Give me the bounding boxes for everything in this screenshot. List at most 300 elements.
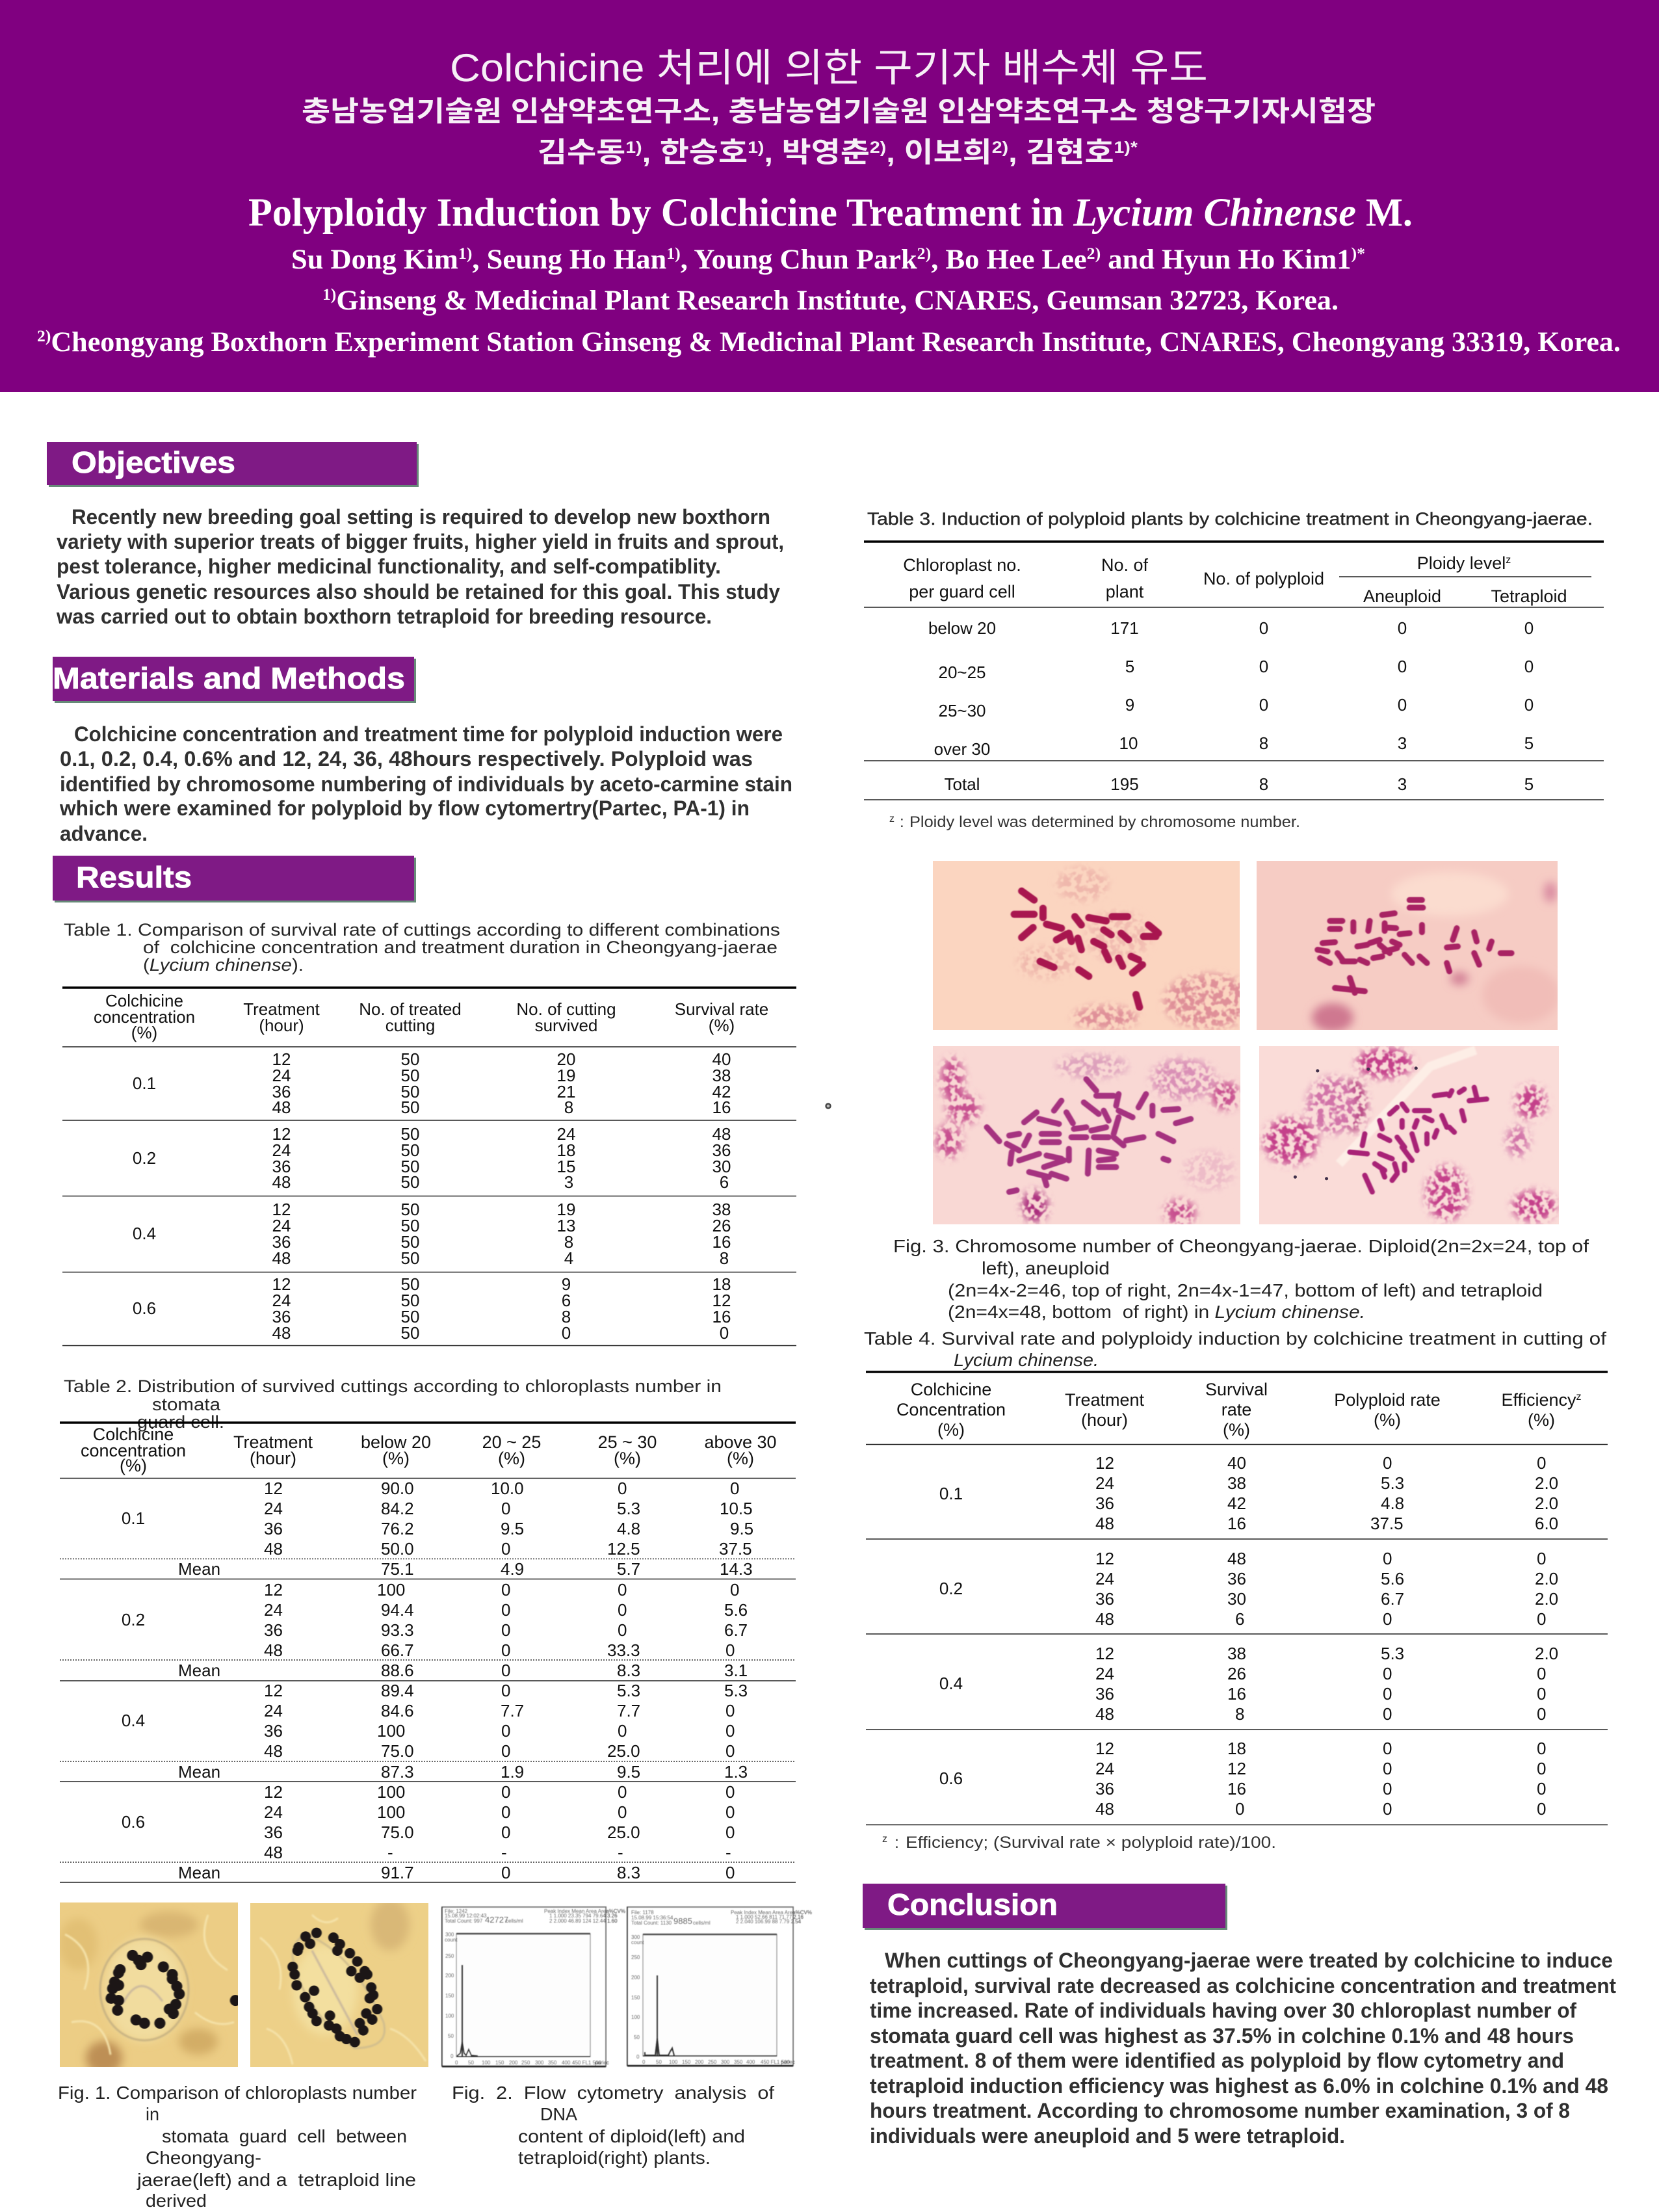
- table 1 rows: 6: [562, 1291, 571, 1310]
- table 2 rows: 5.7: [617, 1559, 640, 1579]
- table 1 rows: 48: [272, 1323, 291, 1343]
- table 3 rows: Total: [945, 774, 980, 794]
- figure 2: flow cytometry diploid: 150: [495, 2060, 504, 2066]
- table 2 rows: 88.6: [381, 1661, 414, 1680]
- figure 2: flow cytometry tetraploid: 300: [721, 2059, 730, 2065]
- table 4 rows: 5.6: [1381, 1569, 1404, 1588]
- table 3 header: Tetraploid: [1491, 586, 1567, 606]
- figure 2: flow cytometry tetraploid: 350: [734, 2059, 743, 2065]
- table 2 rows: 48: [264, 1640, 283, 1660]
- figure 2: flow cytometry tetraploid: 15.08.99 15:36:54: [631, 1915, 673, 1921]
- table 4 header: [896, 1380, 1582, 1440]
- table 1 caption: (Lycium chinense ).: [143, 955, 304, 975]
- figure 2 caption: Fig. 2. Flow cytometry analysis of: [452, 2083, 774, 2103]
- figure 2: flow cytometry tetraploid: 250: [631, 1955, 640, 1960]
- table 2 rows: 100: [377, 1782, 405, 1802]
- table 4 rows: 0: [1383, 1739, 1392, 1758]
- table 4 rows: 0: [1537, 1704, 1546, 1724]
- table 4 rows: 0: [1383, 1704, 1392, 1724]
- authors: English: 2): [917, 245, 931, 263]
- table 4 header: Concentration: [896, 1400, 1006, 1419]
- figure 2: flow cytometry diploid: 250: [521, 2060, 530, 2066]
- table 3 rows: 8: [1259, 733, 1268, 753]
- figure 2: flow cytometry tetraploid: 50: [656, 2059, 662, 2065]
- table 4 rows: 0.6: [939, 1769, 963, 1788]
- conclusion text: time increased. Rate of individuals having over 30 chloroplast number of: [870, 1999, 1576, 2022]
- table 2 rows: 94.4: [381, 1600, 414, 1620]
- heading: materials and methods: Materials and Methods: [53, 661, 405, 695]
- table 3 header: [903, 553, 1567, 606]
- table 1 rows: 48: [272, 1172, 291, 1192]
- methods text: identified by chromosome numbering of individuals by aceto-carmine stain: [60, 772, 792, 796]
- table 3 rows: 0: [1524, 657, 1534, 676]
- heading: objectives: [47, 442, 419, 487]
- table 1 rows: 48: [712, 1124, 731, 1144]
- table 1 rows: 16: [712, 1232, 731, 1252]
- table 2 rows: 0.6: [122, 1812, 145, 1832]
- figure 2: flow cytometry diploid: 100: [445, 2013, 454, 2019]
- table 3: [864, 542, 1604, 800]
- table 2 rows: 36: [264, 1620, 283, 1640]
- title: Korean: Colchicine 처리에 의한 구기자 배수체 유도: [450, 46, 1208, 90]
- table 2 header: Colchicine: [93, 1425, 174, 1444]
- table 4 rows: 0: [1383, 1684, 1392, 1704]
- table 4 caption: Table 4. Survival rate and polyploidy induction by colchicine treatment in cutting of: [864, 1328, 1606, 1349]
- table 1 rows: 21: [557, 1082, 575, 1101]
- affiliations: Korean: 충남농업기술원 인삼약초연구소, 충남농업기술원 인삼약초연구소 청양구기자시험장: [302, 96, 1376, 127]
- figure 2: flow cytometry tetraploid: File: 1178: [631, 1910, 654, 1916]
- table 2 rows: 0: [730, 1479, 739, 1498]
- table 2 rows: 0: [725, 1863, 735, 1882]
- table 3 footnote: z: [889, 813, 895, 824]
- table 2 rows: 0: [618, 1580, 627, 1600]
- affiliation 1: English: 1): [322, 286, 336, 304]
- table 3 rows: 3: [1398, 774, 1407, 794]
- table 1 rows: 12: [272, 1124, 291, 1144]
- table 4 header: (%): [937, 1420, 965, 1440]
- table 4 rows: 6: [1235, 1609, 1244, 1629]
- table 4 rows: 16: [1227, 1779, 1246, 1798]
- table 1 rows: 8: [562, 1307, 571, 1326]
- panel: materials and methods: [53, 657, 792, 845]
- table 3 footnote: :: [900, 813, 904, 831]
- table 1 rows: 36: [272, 1232, 291, 1252]
- conclusion text: individuals were aneuploid and 5 were tetraploid.: [870, 2124, 1345, 2148]
- panel: objectives: [47, 442, 784, 628]
- figure 2: flow cytometry tetraploid: 300: [631, 1934, 640, 1940]
- table 4 rows: 36: [1095, 1779, 1114, 1798]
- figure 2: flow cytometry tetraploid: 2 2.040 106.99 88 7.79 2.54: [736, 1919, 802, 1925]
- heading: results: Results: [76, 860, 192, 894]
- table 4 rows: 0: [1383, 1664, 1392, 1683]
- table 4 header: rate: [1221, 1400, 1251, 1419]
- table 2 rows: 4.9: [501, 1559, 524, 1579]
- methods text: Colchicine concentration and treatment time for polyploid induction were: [74, 722, 783, 746]
- figure 2: flow cytometry diploid: File: 1242: [445, 1908, 468, 1914]
- table 2 rows: 0: [725, 1640, 735, 1660]
- figure 1 caption: Fig. 1. Comparison of chloroplasts number: [58, 2083, 417, 2103]
- table 1 rows: 50: [401, 1049, 419, 1069]
- table 2 rows: 100: [377, 1802, 405, 1822]
- table 3 rows: 3: [1398, 733, 1407, 753]
- authors: English: , Seung Ho Han: [472, 244, 666, 275]
- table 2 rows: 0: [725, 1721, 735, 1741]
- table 1 rows: 16: [712, 1098, 731, 1117]
- table 4 rows: 0.4: [939, 1674, 963, 1693]
- figure 2: flow cytometry diploid: 2 2.000 46.89 124 12.44 1.60: [549, 1918, 618, 1924]
- table 4 rows: 5.3: [1381, 1473, 1404, 1493]
- table 2 rows: 0: [725, 1823, 735, 1842]
- table 4 rows: 0: [1537, 1759, 1546, 1778]
- table 1 rows: 0.4: [133, 1224, 156, 1243]
- figure 2: flow cytometry tetraploid: [627, 1907, 812, 2066]
- table 1 header: cutting: [385, 1016, 435, 1035]
- table 1 rows: 0.6: [133, 1298, 156, 1318]
- figure 2: flow cytometry tetraploid: 150: [631, 1995, 640, 2001]
- table 2 header: (%): [614, 1449, 641, 1468]
- table 1 rows: 8: [720, 1248, 729, 1268]
- table 2 header: 25 ~ 30: [598, 1432, 657, 1452]
- table 1 rows: 19: [557, 1066, 575, 1085]
- table 2 rows: 36: [264, 1519, 283, 1538]
- table 4 rows: 0: [1383, 1609, 1392, 1629]
- figure 3: tetraploid chromosomes: [1259, 1046, 1559, 1224]
- authors: English: , Young Chun Park: [681, 244, 917, 275]
- table 2 rows: 25.0: [607, 1823, 640, 1842]
- table 4 rows: 42: [1227, 1494, 1246, 1513]
- table 2 rows: 75.0: [381, 1741, 414, 1761]
- affiliation 1: English: Ginseng & Medicinal Plant Research Institute, CNARES, Geumsan 32723, Korea.: [336, 285, 1339, 316]
- table 1 rows: 50: [401, 1291, 419, 1310]
- table 4 rows: 12: [1095, 1739, 1114, 1758]
- table 2 rows: 48: [264, 1539, 283, 1559]
- table 4: [866, 1372, 1608, 1824]
- title: English: Polyploidy Induction by Colchicine Treatment in Lycium Chinense M.: [248, 191, 1413, 235]
- table 3 rows: 9: [1125, 695, 1134, 715]
- table 2 rows: 0: [501, 1782, 510, 1802]
- table 4 rows: 0: [1383, 1549, 1392, 1568]
- table 1 rows: 36: [712, 1140, 731, 1160]
- table 1 rows: 50: [401, 1248, 419, 1268]
- table 1 rows: 16: [712, 1307, 731, 1326]
- table 2 rows: 12: [264, 1782, 283, 1802]
- table 3 header: z: [1506, 555, 1511, 566]
- figure 1: stomata right photo: [250, 1899, 428, 2067]
- table 1 rows: 36: [272, 1082, 291, 1101]
- table 2 rows: 33.3: [607, 1640, 640, 1660]
- table 2 rows: 9.5: [730, 1519, 753, 1538]
- table 2 rows: 10.0: [491, 1479, 524, 1498]
- conclusion text: stomata guard cell was highest as 37.5% in colchine 0.1% and 48 hours: [870, 2024, 1574, 2047]
- table 4 rows: 0: [1537, 1739, 1546, 1758]
- table 4 rows: 36: [1095, 1589, 1114, 1609]
- table 4 header: Treatment: [1065, 1390, 1145, 1410]
- header banner: [0, 0, 1659, 392]
- table 2 rows: 0: [725, 1802, 735, 1822]
- table 2 rows: 89.4: [381, 1681, 414, 1700]
- authors: Korean: , 이보희: [886, 137, 992, 168]
- table 2 header: concentration: [81, 1441, 186, 1460]
- table 1 rows: 48: [272, 1098, 291, 1117]
- table 2 rows: 24: [264, 1701, 283, 1720]
- table 1 rows: 18: [712, 1274, 731, 1294]
- table 2 rows: 9.5: [617, 1762, 640, 1782]
- figure 1 caption: stomata guard cell between: [162, 2126, 407, 2146]
- table 1 rows: 38: [712, 1200, 731, 1219]
- figure 2: flow cytometry tetraploid: 50: [634, 2034, 640, 2040]
- table 3 rows: 0: [1259, 695, 1268, 715]
- table 2 rows: 24: [264, 1802, 283, 1822]
- table 4 rows: 36: [1227, 1569, 1246, 1588]
- table 3 rows: 171: [1110, 618, 1139, 638]
- figure 2: flow cytometry diploid: 100: [482, 2060, 491, 2066]
- table 4 rows: [939, 1453, 1558, 1819]
- table 2 header: (hour): [250, 1449, 296, 1468]
- figure 2: flow cytometry diploid: parlec: [595, 2060, 609, 2066]
- table 4 footnote: Efficiency; (Survival rate × polyploid rate)/100.: [906, 1834, 1276, 1852]
- table 4 rows: 2.0: [1535, 1473, 1558, 1493]
- table 2 header: 20 ~ 25: [482, 1432, 541, 1452]
- table 2 rows: 0: [501, 1802, 510, 1822]
- table 1 header: [94, 991, 768, 1042]
- table 3 rows: 0: [1398, 657, 1407, 676]
- table 2 caption: [64, 1376, 722, 1432]
- table 2 rows: 9.5: [501, 1519, 524, 1538]
- table 4 rows: 48: [1227, 1549, 1246, 1568]
- figure 2: flow cytometry tetraploid: 1 1.000 52.66 811 71.77 2.16: [736, 1914, 803, 1920]
- figure 2: flow cytometry diploid: Total Count: 997: [445, 1918, 483, 1924]
- table 2 rows: 76.2: [381, 1519, 414, 1538]
- table 2 rows: -: [618, 1843, 623, 1862]
- table 2 header: (%): [727, 1449, 754, 1468]
- figure 2 caption: DNA: [540, 2104, 577, 2124]
- table 4 rows: 18: [1227, 1739, 1246, 1758]
- table 1 rows: 50: [401, 1082, 419, 1101]
- table 3 header: Ploidy level: [1417, 553, 1506, 573]
- table 2 rows: 6.7: [724, 1620, 748, 1640]
- table 4 rows: 38: [1227, 1473, 1246, 1493]
- figure 1 caption: [58, 2083, 417, 2211]
- table 1 header: survived: [535, 1016, 597, 1035]
- table 2 rows: 8.3: [617, 1661, 640, 1680]
- table 1 header: (hour): [259, 1016, 304, 1035]
- table 1 rows: 12: [272, 1274, 291, 1294]
- table 1 rows: 12: [272, 1049, 291, 1069]
- table 2 rows: 5.3: [617, 1681, 640, 1700]
- table 2 rows: -: [501, 1843, 507, 1862]
- objectives text: Recently new breeding goal setting is required to develop new boxthorn: [72, 505, 770, 529]
- table 2 rows: 0: [725, 1782, 735, 1802]
- table 2 rows: 12.5: [607, 1539, 640, 1559]
- table 2 rows: 7.7: [501, 1701, 524, 1720]
- table 3 rows: 195: [1110, 774, 1139, 794]
- table 4 rows: 4.8: [1381, 1494, 1404, 1513]
- table 2 rows: 100: [377, 1721, 405, 1741]
- table 4 rows: 0: [1537, 1453, 1546, 1473]
- table 2 rows: 25.0: [607, 1741, 640, 1761]
- table 2 rows: 0: [501, 1661, 510, 1680]
- affiliation 2: English: 2): [37, 328, 51, 345]
- table 1 rows: 50: [401, 1098, 419, 1117]
- table 2 rows: 12: [264, 1479, 283, 1498]
- objectives text: Various genetic resources also should be retained for this goal. This study: [57, 580, 780, 603]
- table 3 rows: 0: [1524, 618, 1534, 638]
- figure 2: flow cytometry diploid: count: [445, 1937, 458, 1943]
- objectives text: was carried out to obtain boxthorn tetraploid for breeding resource.: [56, 605, 712, 628]
- table 2 rows: 0.4: [122, 1711, 145, 1730]
- authors: English: 1): [666, 245, 681, 263]
- table 4 rows: 5.3: [1381, 1644, 1404, 1663]
- table 4 rows: 12: [1095, 1549, 1114, 1568]
- table 3 rows: 0: [1259, 657, 1268, 676]
- table 1 rows: 38: [712, 1066, 731, 1085]
- table 4 header: Polyploid rate: [1334, 1390, 1441, 1410]
- figure 2: flow cytometry tetraploid: 400: [746, 2059, 755, 2065]
- table 4 rows: 24: [1095, 1759, 1114, 1778]
- table 1 rows: 26: [712, 1216, 731, 1235]
- table 1 rows: 50: [401, 1066, 419, 1085]
- table 1 header: (%): [131, 1023, 157, 1042]
- figure 2: flow cytometry diploid: Peak Index Mean Area Area%CV%: [544, 1908, 625, 1914]
- table 2 rows: 0: [501, 1620, 510, 1640]
- figure 2: flow cytometry diploid: 0: [455, 2060, 458, 2066]
- table 4 rows: 0: [1537, 1609, 1546, 1629]
- figure 2: flow cytometry tetraploid: 0: [642, 2059, 646, 2065]
- authors: Korean: 1): [625, 138, 642, 157]
- table 4 rows: 16: [1227, 1684, 1246, 1704]
- authors: English: Su Dong Kim: [291, 244, 453, 275]
- methods text: [59, 722, 792, 845]
- figure 2: flow cytometry diploid: 350: [548, 2060, 557, 2066]
- table 4 header: Survival: [1205, 1380, 1268, 1399]
- table 2 rows: 0: [501, 1640, 510, 1660]
- table 2 rows: 0: [730, 1580, 739, 1600]
- table 1 rows: 50: [401, 1274, 419, 1294]
- figure 2: flow cytometry tetraploid: 250: [708, 2059, 717, 2065]
- table 1 rows: 40: [712, 1049, 731, 1069]
- table 2 rows: 75.0: [381, 1823, 414, 1842]
- table 4 rows: 0: [1383, 1453, 1392, 1473]
- table 2 rows: 0: [618, 1721, 627, 1741]
- table 2: [60, 1423, 796, 1882]
- table 4 header: Colchicine: [911, 1380, 991, 1399]
- table 4 rows: 0: [1537, 1779, 1546, 1798]
- table 4 rows: 36: [1095, 1684, 1114, 1704]
- table 4 rows: 6.0: [1535, 1514, 1558, 1533]
- table 2 rows: 0.2: [122, 1610, 145, 1629]
- table 1 rows: 15: [557, 1157, 575, 1176]
- table 2 rows: 14.3: [720, 1559, 753, 1579]
- figure 2 caption: [452, 2083, 774, 2168]
- table 1 rows: 50: [401, 1307, 419, 1326]
- table 2 rows: 90.0: [381, 1479, 414, 1498]
- figure 2: flow cytometry tetraploid: count: [631, 1940, 644, 1945]
- heading: objectives: Objectives: [72, 445, 235, 479]
- table 1 header: (%): [709, 1016, 735, 1035]
- figure 2: flow cytometry tetraploid: 100: [631, 2014, 640, 2020]
- table 2 rows: 1.3: [724, 1762, 748, 1782]
- table 3 rows: 0: [1259, 618, 1268, 638]
- table 4 header: (%): [1223, 1420, 1250, 1440]
- table 2 rows: 4.8: [617, 1519, 640, 1538]
- table 2 rows: Mean: [178, 1762, 220, 1782]
- table 2 rows: 0: [501, 1499, 510, 1518]
- table 2 rows: 50.0: [381, 1539, 414, 1559]
- table 4 header: Efficiency: [1501, 1390, 1576, 1410]
- table 4 rows: 0: [1383, 1759, 1392, 1778]
- table 2 header: (%): [120, 1456, 147, 1475]
- table 1 rows: 20: [557, 1049, 575, 1069]
- figure 2: flow cytometry diploid: 0: [451, 2053, 454, 2059]
- table 2 rows: 0: [618, 1600, 627, 1620]
- table 1 rows: [133, 1049, 731, 1343]
- table 4 rows: 2.0: [1535, 1494, 1558, 1513]
- table 4 header: (%): [1528, 1410, 1555, 1430]
- table 3 header: No. of: [1101, 555, 1149, 575]
- table 2 rows: Mean: [178, 1661, 220, 1680]
- table 1 rows: 4: [564, 1248, 573, 1268]
- figure 3 caption: Fig. 3. Chromosome number of Cheongyang-jaerae. Diploid(2n=2x=24, top of: [893, 1236, 1589, 1256]
- affiliation 2: English: Cheongyang Boxthorn Experiment Station Ginseng & Medicinal Plant Research Institute, CNARES, Cheongyang 33319, Korea.: [51, 327, 1621, 358]
- table 4 rows: 0.1: [939, 1484, 963, 1503]
- figure 2: flow cytometry diploid: 400: [562, 2060, 571, 2066]
- table 4 rows: 48: [1095, 1704, 1114, 1724]
- table 2 caption: Table 2. Distribution of survived cuttings according to chloroplasts number in: [64, 1376, 722, 1396]
- table 3 rows: 5: [1125, 657, 1134, 676]
- table 2 rows: 66.7: [381, 1640, 414, 1660]
- authors: English: )*: [1351, 245, 1365, 263]
- figure 3 caption: left), aneuploid: [982, 1258, 1110, 1278]
- authors: Korean: , 박영춘: [764, 137, 870, 168]
- table 4 rows: 48: [1095, 1609, 1114, 1629]
- table 2 rows: 8.3: [617, 1863, 640, 1882]
- table 1 rows: 50: [401, 1157, 419, 1176]
- table 1 rows: 0: [562, 1323, 571, 1343]
- table 1 header: No. of cutting: [516, 999, 616, 1019]
- table 4 rows: 48: [1095, 1799, 1114, 1819]
- table 2 rows: 7.7: [617, 1701, 640, 1720]
- authors: English: , Bo Hee Lee: [931, 244, 1087, 275]
- conclusion text: tetraploid, survival rate decreased as colchicine concentration and treatment: [870, 1974, 1616, 1997]
- table 2 rows: 5.3: [724, 1681, 748, 1700]
- table 2 rows: 0: [618, 1802, 627, 1822]
- heading: materials and methods: [53, 657, 416, 703]
- table 4 rows: 2.0: [1535, 1569, 1558, 1588]
- table 4 header: (%): [1374, 1410, 1401, 1430]
- objectives text: [56, 505, 784, 628]
- table 1 rows: 30: [712, 1157, 731, 1176]
- table 1 rows: 50: [401, 1124, 419, 1144]
- table 3 rows: 5: [1524, 733, 1534, 753]
- panel: conclusion: [863, 1884, 1616, 2148]
- table 1 rows: 50: [401, 1232, 419, 1252]
- table 4 rows: 0: [1235, 1799, 1244, 1819]
- table 3 rows: 0: [1524, 695, 1534, 715]
- table 4 footnote: :: [895, 1834, 899, 1852]
- table 1 rows: 9: [562, 1274, 571, 1294]
- table 1 rows: 24: [272, 1140, 291, 1160]
- figure 3: aneuploid 47 chromosomes: [933, 1046, 1240, 1226]
- table 2 caption: stomata: [152, 1395, 221, 1414]
- figure 2: flow cytometry diploid: 50: [468, 2060, 474, 2066]
- conclusion text: When cuttings of Cheongyang-jaerae were treated by colchicine to induce: [885, 1949, 1613, 1972]
- table 2 rows: 48: [264, 1741, 283, 1761]
- table 2 rows: 36: [264, 1823, 283, 1842]
- authors: Korean: 김수동: [538, 137, 615, 168]
- authors: Korean: , 한승호: [642, 137, 748, 168]
- table 2 rows: 0: [501, 1580, 510, 1600]
- figure 2: flow cytometry tetraploid: 150: [682, 2059, 691, 2065]
